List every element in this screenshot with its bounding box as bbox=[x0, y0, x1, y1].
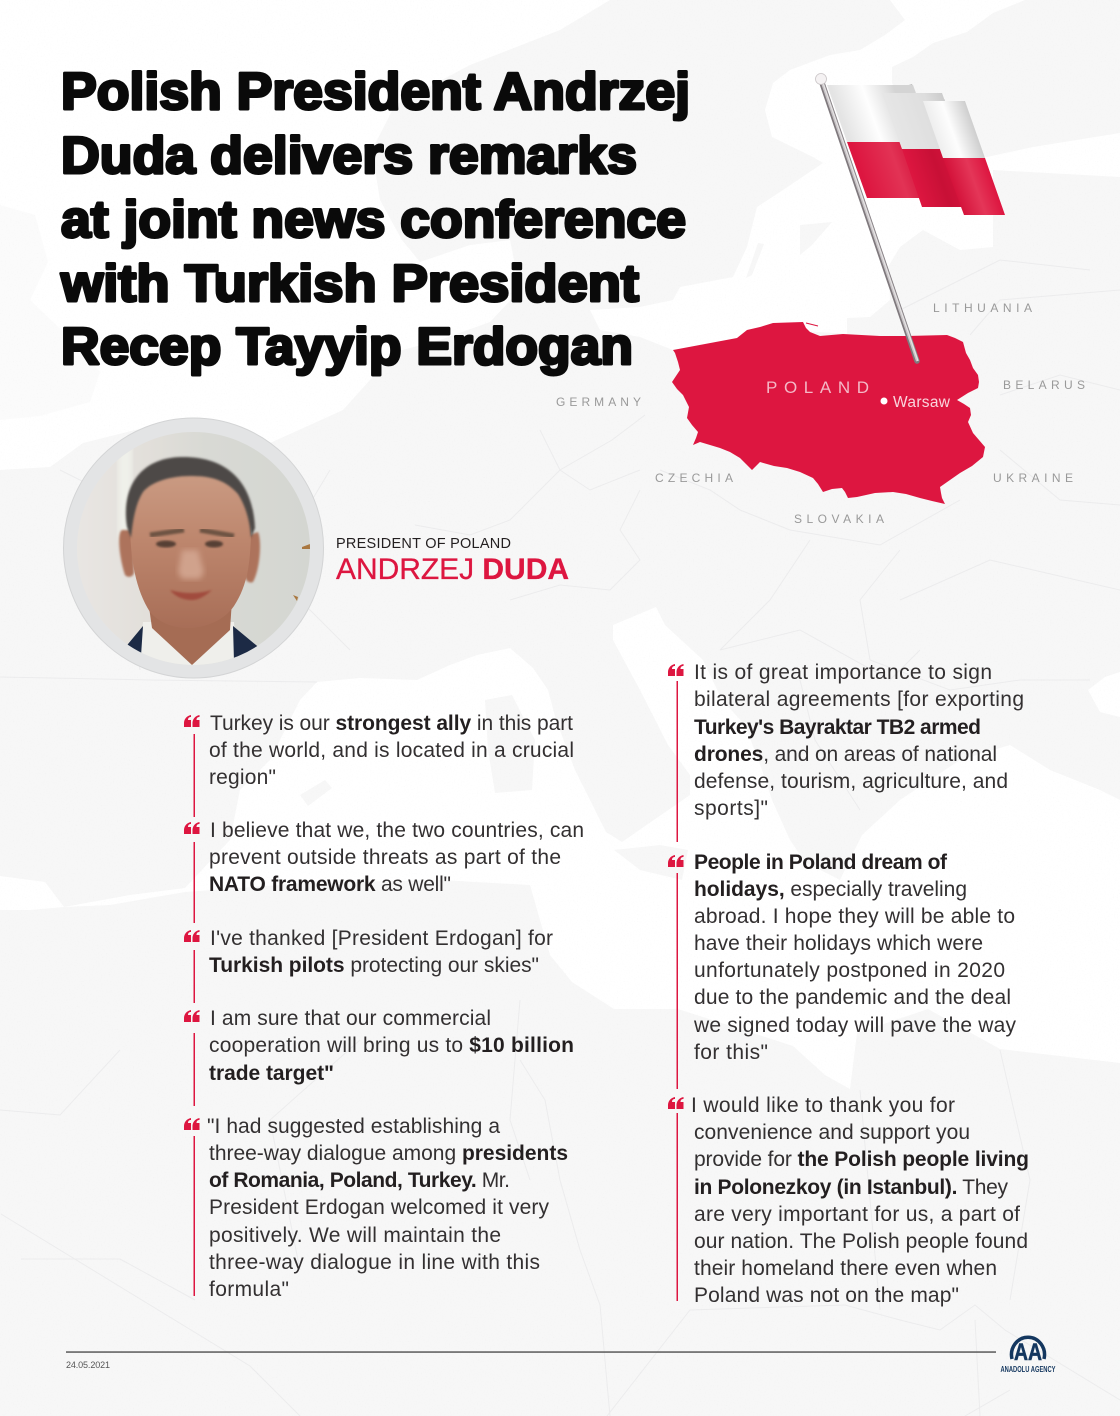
quote: Bayraktar TB2: defense, tourism, agriculture, and bbox=[694, 770, 1008, 793]
quote: three-way dialogue: "I had suggested establishing a bbox=[207, 1115, 500, 1138]
quote: holidays: unfortunately postponed in 2020 bbox=[694, 959, 1005, 982]
title: Duda delivers remarks bbox=[61, 127, 637, 185]
quote: Bayraktar TB2: sports]" bbox=[694, 797, 768, 820]
name: ANDRZEJ DUDA bbox=[336, 553, 569, 586]
quote: trade target: trade target" bbox=[209, 1062, 334, 1085]
neighbouring country labels: GERMANY bbox=[556, 395, 641, 409]
quote: NATO framework: NATO framework as well" bbox=[209, 873, 451, 896]
quote: strongest ally bbox=[184, 712, 574, 817]
quote: holidays: People in Poland dream of bbox=[694, 851, 948, 874]
quote: three-way dialogue: three-way dialogue among presidents bbox=[209, 1142, 568, 1165]
neighbouring country labels bbox=[556, 301, 1085, 526]
quote: NATO framework: I believe that we, the two countries, can bbox=[210, 819, 584, 842]
neighbouring country labels: CZECHIA bbox=[655, 471, 733, 485]
neighbouring country labels: BELARUS bbox=[1003, 378, 1085, 392]
quote: holidays: abroad. I hope they will be able to bbox=[694, 905, 1015, 928]
quote: Polish people in Polonezkoy: are very important for us, a part of bbox=[694, 1203, 1020, 1226]
quote: Turkish pilots: Turkish pilots protecting our skies" bbox=[209, 954, 539, 977]
neighbouring country labels: SLOVAKIA bbox=[794, 512, 884, 526]
portrait photo bbox=[116, 432, 310, 665]
quote: trade target bbox=[184, 1007, 574, 1106]
quote: NATO framework: prevent outside threats as part of the bbox=[209, 846, 561, 869]
quote: three-way dialogue: formula" bbox=[209, 1278, 289, 1301]
map of Poland bbox=[672, 322, 985, 504]
label: Warsaw: Warsaw bbox=[893, 394, 951, 411]
quote: Turkish pilots: I've thanked [President Erdogan] for bbox=[210, 927, 553, 950]
date: 24.05.2021 bbox=[66, 1360, 110, 1370]
quote: Polish people in Polonezkoy bbox=[668, 1094, 1029, 1307]
quote: Bayraktar TB2: drones, and on areas of national bbox=[694, 743, 997, 766]
quote: trade target: cooperation will bring us to $10 billion bbox=[209, 1034, 574, 1057]
quote: three-way dialogue: President Erdogan welcomed it very bbox=[209, 1196, 550, 1219]
quote: Bayraktar TB2: It is of great importance to sign bbox=[694, 661, 992, 684]
title: at joint news conference bbox=[61, 191, 686, 249]
quote: strongest ally: region" bbox=[209, 766, 276, 789]
quote: Polish people in Polonezkoy: I would like to thank you for bbox=[691, 1094, 955, 1117]
neighbouring country labels: LITHUANIA bbox=[933, 301, 1032, 315]
quote: Polish people in Polonezkoy: in Polonezkoy (in Istanbul). They bbox=[694, 1176, 1008, 1199]
logo: Anadolu Agency: ANADOLU AGENCY bbox=[1000, 1365, 1056, 1374]
logo: Anadolu Agency: AA bbox=[1014, 1339, 1042, 1366]
quote: Turkish pilots bbox=[184, 927, 553, 1003]
quote: Bayraktar TB2 bbox=[668, 661, 1024, 842]
title: with Turkish President bbox=[60, 255, 639, 313]
quote: strongest ally: of the world, and is located in a crucial bbox=[209, 739, 574, 762]
title: Recep Tayyip Erdogan bbox=[61, 318, 633, 376]
footer rule bbox=[66, 1351, 996, 1353]
quote: three-way dialogue bbox=[184, 1115, 568, 1301]
title bbox=[60, 63, 690, 376]
quote: holidays: have their holidays which were bbox=[694, 932, 983, 955]
quote: holidays: we signed today will pave the way bbox=[693, 1014, 1016, 1037]
label: Poland: POLAND bbox=[766, 378, 869, 397]
quote: holidays bbox=[668, 851, 1016, 1089]
neighbouring country labels: UKRAINE bbox=[993, 471, 1073, 485]
quote: holidays: holidays, especially traveling bbox=[694, 878, 967, 901]
title: Polish President Andrzej bbox=[61, 63, 690, 121]
name block bbox=[336, 536, 569, 586]
quote: Polish people in Polonezkoy: convenience and support you bbox=[694, 1121, 970, 1144]
quote: three-way dialogue: positively. We will maintain the bbox=[209, 1224, 501, 1247]
quote: holidays: for this" bbox=[694, 1041, 768, 1064]
quote: Polish people in Polonezkoy: our nation. The Polish people found bbox=[694, 1230, 1028, 1253]
portrait ring bbox=[64, 418, 324, 678]
role: PRESIDENT OF POLAND bbox=[336, 536, 511, 552]
quote: strongest ally: Turkey is our strongest ally in this part bbox=[210, 712, 573, 735]
quote: trade target: I am sure that our commercial bbox=[210, 1007, 491, 1030]
quote: Polish people in Polonezkoy: provide for the Polish people living bbox=[694, 1148, 1029, 1171]
logo: Anadolu Agency bbox=[1000, 1337, 1056, 1374]
quote: holidays: due to the pandemic and the deal bbox=[694, 986, 1011, 1009]
quote: Polish people in Polonezkoy: Poland was not on the map" bbox=[694, 1284, 959, 1307]
quote: three-way dialogue: three-way dialogue in line with this bbox=[209, 1251, 540, 1274]
quote: Polish people in Polonezkoy: their homeland there even when bbox=[694, 1257, 997, 1280]
quote: Bayraktar TB2: Turkey's Bayraktar TB2 armed bbox=[694, 716, 981, 739]
quote: NATO framework bbox=[184, 819, 584, 923]
quote: Bayraktar TB2: bilateral agreements [for exporting bbox=[694, 688, 1024, 711]
icon: Polish flag on pole bbox=[816, 74, 1005, 361]
quote: three-way dialogue: of Romania, Poland, Turkey. Mr. bbox=[209, 1169, 510, 1192]
